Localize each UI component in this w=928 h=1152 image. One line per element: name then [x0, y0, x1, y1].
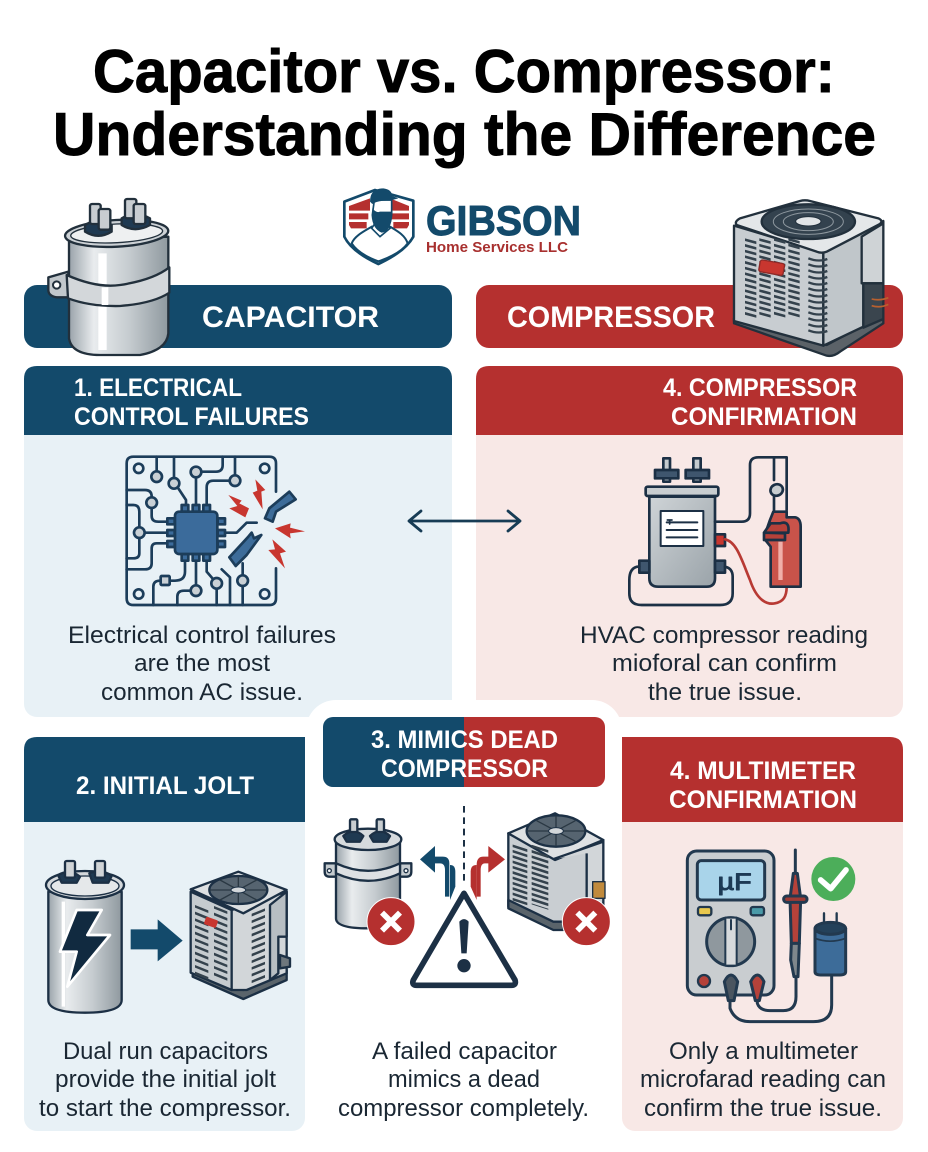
- text: compressor confirmation: the true issue.: [648, 679, 802, 706]
- heading: mimics dead compressor: 3. MIMICS DEAD: [371, 726, 558, 754]
- text: electrical control failures: [68, 622, 336, 706]
- heading: multimeter confirmation: [669, 757, 857, 814]
- heading: compressor confirmation: 4. COMPRESSOR: [663, 374, 857, 402]
- heading: electrical control failures: 1. ELECTRICAL: [74, 374, 242, 402]
- text: compressor confirmation: HVAC compressor reading: [580, 622, 868, 649]
- icon: circuit board with broken trace: [127, 457, 305, 605]
- icon: failed capacitor and compressor with warning: [325, 806, 610, 985]
- logo: Gibson Home Services LLC: GIBSON: [426, 197, 581, 244]
- text: electrical control failures: are the most: [134, 650, 270, 677]
- banner: capacitor: [24, 285, 452, 348]
- text: initial jolt: provide the initial jolt: [55, 1066, 276, 1093]
- logo: Gibson Home Services LLC: Home Services LLC: [426, 239, 568, 256]
- heading: multimeter confirmation: CONFIRMATION: [669, 786, 857, 814]
- heading: electrical control failures: [74, 374, 309, 431]
- icon: compressor with gauge: [629, 457, 801, 605]
- text: electrical control failures: Electrical control failures: [68, 622, 336, 649]
- banner: compressor: COMPRESSOR: [507, 301, 715, 334]
- panel: initial jolt: [24, 737, 305, 1131]
- heading: mimics dead compressor: COMPRESSOR: [381, 755, 548, 783]
- panel: electrical control failures: [24, 366, 452, 717]
- heading: initial jolt: 2. INITIAL JOLT: [76, 772, 254, 800]
- heading: compressor confirmation: CONFIRMATION: [671, 403, 857, 431]
- text: mimics dead compressor: compressor completely.: [338, 1095, 589, 1122]
- text: multimeter confirmation: Only a multimeter: [669, 1038, 858, 1065]
- heading: multimeter confirmation: 4. MULTIMETER: [670, 757, 856, 785]
- icon: compressor large: [734, 200, 888, 356]
- icon: multimeter and capacitor: µF: [718, 869, 752, 896]
- title: Understanding the Difference: [53, 101, 876, 168]
- heading: mimics dead compressor: [323, 717, 605, 787]
- text: multimeter confirmation: microfarad reading can: [640, 1066, 886, 1093]
- title: Capacitor vs. Compressor:: [93, 38, 835, 105]
- arrow: double-headed comparison: [409, 511, 520, 531]
- heading: compressor confirmation: [663, 374, 857, 431]
- panel: compressor confirmation: [476, 366, 903, 717]
- banner: compressor: [476, 285, 903, 348]
- icon: capacitor large: [48, 199, 169, 355]
- logo: Gibson Home Services LLC: [344, 188, 581, 264]
- icon: capacitor feeding compressor: [46, 861, 290, 1013]
- text: mimics dead compressor: A failed capacitor: [372, 1038, 557, 1065]
- text: mimics dead compressor: [338, 1038, 589, 1122]
- title: [53, 38, 876, 168]
- text: initial jolt: to start the compressor.: [39, 1095, 291, 1122]
- text: initial jolt: [39, 1038, 291, 1122]
- banner: capacitor: CAPACITOR: [202, 301, 379, 334]
- panel: multimeter confirmation: [622, 737, 903, 1131]
- text: compressor confirmation: mioforal can confirm: [612, 650, 837, 677]
- text: compressor confirmation: [580, 622, 868, 706]
- icon: multimeter and capacitor: [687, 850, 855, 1022]
- text: multimeter confirmation: confirm the true issue.: [644, 1095, 882, 1122]
- text: mimics dead compressor: mimics a dead: [388, 1066, 540, 1093]
- panel: mimics dead compressor: [306, 700, 622, 1145]
- text: electrical control failures: common AC issue.: [101, 679, 303, 706]
- text: initial jolt: Dual run capacitors: [63, 1038, 268, 1065]
- text: multimeter confirmation: [640, 1038, 886, 1122]
- heading: electrical control failures: CONTROL FAILURES: [74, 403, 309, 431]
